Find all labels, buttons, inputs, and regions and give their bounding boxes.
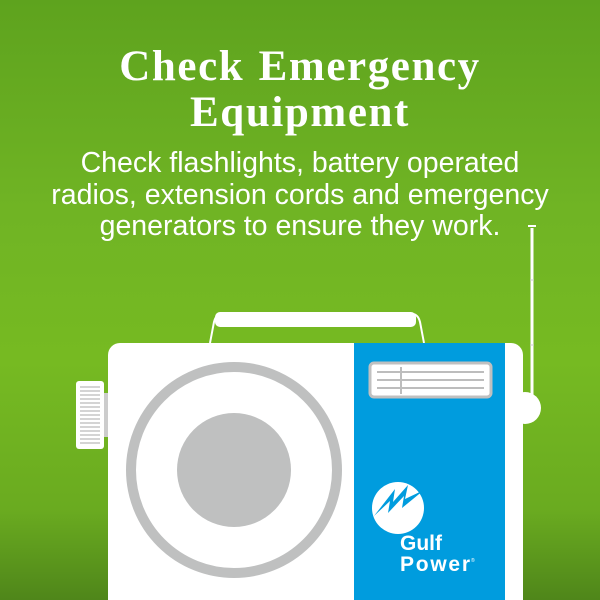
antenna xyxy=(528,226,536,400)
handle xyxy=(210,312,424,343)
subtitle text: Check flashlights, battery operated xyxy=(81,147,519,179)
radio body xyxy=(108,343,523,600)
title: Equipment xyxy=(190,89,410,136)
grill xyxy=(370,363,491,397)
subtitle text: radios, extension cords and emergency xyxy=(51,178,549,210)
logo xyxy=(372,482,475,576)
side tuner xyxy=(76,381,110,449)
title xyxy=(119,43,481,136)
subtitle text: generators to ensure they work. xyxy=(100,210,500,242)
subtitle text xyxy=(51,147,549,242)
knob xyxy=(509,392,541,424)
title: Check Emergency xyxy=(119,43,481,90)
logo: ® xyxy=(471,557,475,564)
logo: Power xyxy=(400,553,470,576)
logo: Gulf xyxy=(400,532,443,555)
speaker xyxy=(131,367,337,573)
